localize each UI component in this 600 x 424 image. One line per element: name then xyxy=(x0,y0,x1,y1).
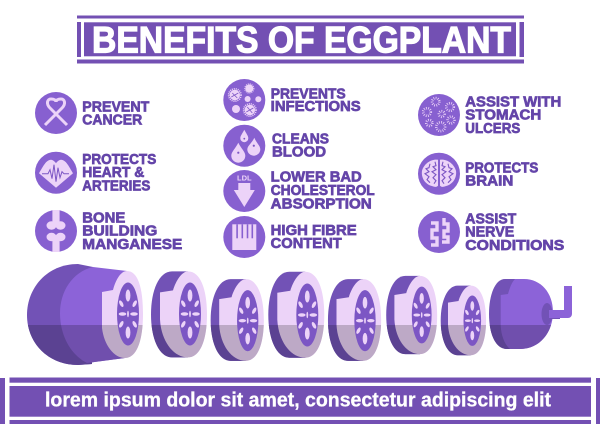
text: assist nerve conditions: CONDITIONS xyxy=(465,238,565,254)
icon: LDL down arrow: LDL xyxy=(237,173,252,182)
text: bone building manganese: BONE xyxy=(82,210,126,226)
text: protects brain xyxy=(465,160,539,189)
text: prevent cancer xyxy=(82,100,149,129)
footer banner xyxy=(0,378,600,424)
text: protects brain: BRAIN xyxy=(465,173,513,189)
icon: cancer ribbon xyxy=(35,92,77,134)
slice 6 xyxy=(441,286,486,355)
text: lower bad cholesterol absorption: ABSORPTION xyxy=(271,196,372,212)
icon: heart with pulse xyxy=(35,152,77,194)
eggplant end: stem xyxy=(489,279,568,349)
text: prevents infections: PREVENTS xyxy=(271,86,346,102)
eggplant end: base xyxy=(27,264,143,365)
icon: LDL down arrow xyxy=(223,170,265,212)
icon: nerves xyxy=(418,211,460,253)
eggplant: sliced illustration xyxy=(27,264,568,365)
text: assist nerve conditions: ASSIST xyxy=(465,211,516,227)
text: protects heart and arteries: ARTERIES xyxy=(82,178,151,194)
text: protects heart and arteries: PROTECTS xyxy=(82,152,157,168)
text: prevent cancer: PREVENT xyxy=(82,100,149,116)
text: lower bad cholesterol absorption xyxy=(271,170,375,212)
text: lower bad cholesterol absorption: CHOLESTEROL xyxy=(271,183,375,199)
icon: viruses xyxy=(223,79,265,121)
title: BENEFITS OF EGGPLANT xyxy=(92,20,511,60)
text: assist nerve conditions xyxy=(465,211,565,254)
slice 5 xyxy=(386,276,437,354)
text: high fibre content: CONTENT xyxy=(271,236,342,252)
text: protects heart and arteries: HEART & xyxy=(82,165,145,181)
text: bone building manganese xyxy=(82,210,183,253)
icon: brain xyxy=(418,153,460,195)
text: prevents infections: INFECTIONS xyxy=(271,99,361,115)
slice 1 xyxy=(151,271,207,357)
footer banner: lorem ipsum dolor sit amet, consectetur adipiscing elit xyxy=(45,390,551,412)
text: cleans blood xyxy=(272,131,329,161)
text: lower bad cholesterol absorption: LOWER BAD xyxy=(271,170,362,186)
icon: fibre block xyxy=(223,216,265,258)
text: assist nerve conditions: NERVE xyxy=(465,225,515,241)
slice 3 xyxy=(268,272,324,358)
text: cleans blood: CLEANS xyxy=(272,131,329,147)
text: high fibre content xyxy=(271,223,357,252)
slice 4 xyxy=(328,279,381,361)
icon: blood drops xyxy=(223,125,265,167)
text: prevents infections xyxy=(271,86,361,115)
text: high fibre content: HIGH FIBRE xyxy=(271,223,357,239)
text: assist with stomach ulcers xyxy=(465,95,561,137)
slice 2 xyxy=(211,279,264,361)
text: assist with stomach ulcers: ULCERS xyxy=(465,121,521,137)
icon: bone joint xyxy=(35,210,77,252)
text: bone building manganese: BUILDING xyxy=(82,224,157,240)
text: prevent cancer: CANCER xyxy=(82,113,143,129)
text: bone building manganese: MANGANESE xyxy=(82,237,183,253)
text: protects heart and arteries xyxy=(82,152,157,194)
text: protects brain: PROTECTS xyxy=(465,160,539,176)
text: cleans blood: BLOOD xyxy=(272,145,326,161)
icon: stomach ulcers xyxy=(418,94,460,136)
text: assist with stomach ulcers: ASSIST WITH xyxy=(465,95,561,111)
text: assist with stomach ulcers: STOMACH xyxy=(465,108,541,124)
